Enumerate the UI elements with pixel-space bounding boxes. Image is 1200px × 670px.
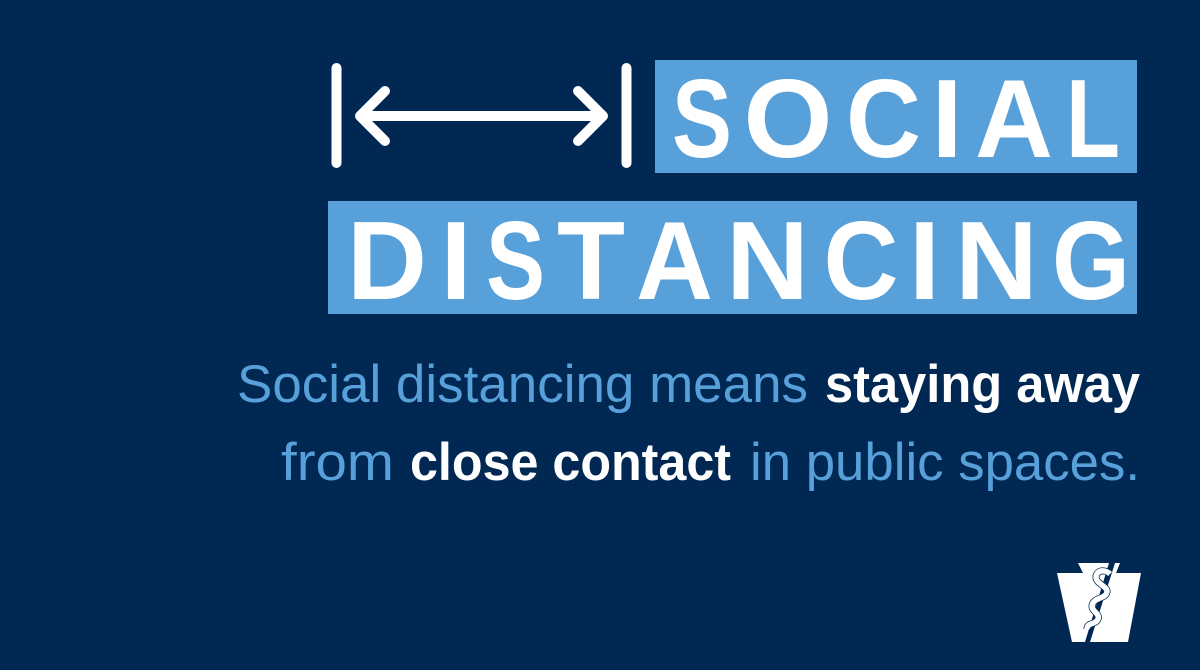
heading: distancing: S bbox=[486, 199, 545, 323]
text: definition line 1: staying away bbox=[825, 355, 1140, 414]
heading: distancing: T bbox=[557, 199, 625, 323]
heading: social: A bbox=[975, 57, 1053, 181]
heading: distancing: I bbox=[909, 199, 940, 323]
text: definition line 2: from bbox=[281, 433, 394, 492]
text: definition line 2: close contact bbox=[410, 433, 731, 492]
icon: distance arrow bbox=[336, 68, 626, 163]
text: definition line 1 bbox=[237, 355, 1140, 414]
heading: social: C bbox=[846, 57, 921, 181]
heading: social: L bbox=[1066, 57, 1120, 181]
text: definition line 2: in public spaces. bbox=[750, 433, 1140, 492]
heading: distancing: D bbox=[347, 199, 427, 323]
heading: distancing: N bbox=[726, 199, 809, 323]
heading: social: I bbox=[932, 57, 962, 181]
heading: distancing: A bbox=[636, 199, 713, 323]
heading: social: S bbox=[672, 57, 732, 181]
heading: social: O bbox=[744, 57, 832, 181]
icon: keystone logo bbox=[1057, 563, 1141, 642]
heading: distancing: C bbox=[824, 199, 898, 323]
text: definition line 2 bbox=[281, 433, 1140, 492]
heading: distancing: I bbox=[440, 199, 472, 323]
heading: distancing: N bbox=[955, 199, 1038, 323]
heading: distancing bbox=[328, 199, 1137, 323]
heading: social bbox=[655, 57, 1137, 181]
heading: distancing: G bbox=[1052, 199, 1130, 323]
text: definition line 1: Social distancing means bbox=[237, 355, 808, 414]
